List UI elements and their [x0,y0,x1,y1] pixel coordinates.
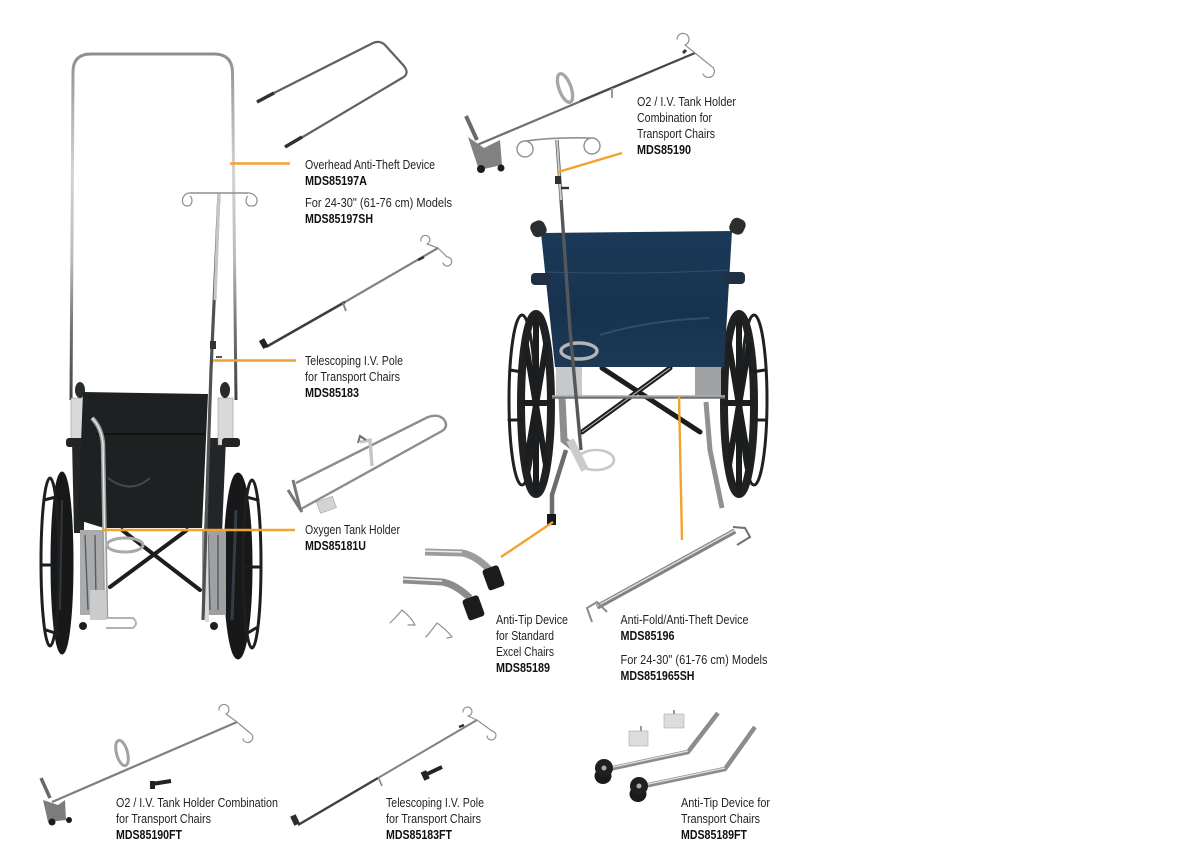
frame and foot rests [547,367,725,525]
orange leader: anti-fold [679,396,682,540]
product: top o2 / i.v. tank holder combination [466,33,714,173]
label: anti-tip device [496,613,568,675]
label: anti-tip device for transport chairs: Anti-Tip Device for [681,796,770,810]
label: bottom telescoping i.v. pole: Telescoping I.V. Pole [386,796,484,810]
label: anti-tip device: for Standard [496,629,554,643]
label: bottom o2 / i.v. tank holder: for Transport Chairs [116,812,211,826]
label: top o2 / i.v. tank holder combination: O2 / I.V. Tank Holder [637,95,736,109]
black seat back [78,392,208,528]
orange leader: o2 tank holder [558,153,622,172]
label: oxygen tank holder [305,523,400,553]
label: anti-fold / anti-theft device [620,613,768,683]
left wheelchair with accessories [41,54,261,658]
label: oxygen tank holder: MDS85181U [305,539,366,553]
right wheelchair with accessories [509,138,767,525]
label: telescoping i.v. pole: MDS85183 [305,386,359,400]
label: anti-tip device: Excel Chairs [496,645,554,659]
label: bottom o2 / i.v. tank holder [116,796,278,842]
product: overhead anti-theft device [257,42,407,147]
label: oxygen tank holder: Oxygen Tank Holder [305,523,400,537]
frame and side plates [66,382,240,630]
telescoping i.v. pole [182,193,257,620]
product: oxygen tank holder [288,416,446,513]
orange leader: oxygen holder [102,529,295,531]
product: bottom o2 / i.v. tank holder [41,704,253,826]
label: bottom telescoping i.v. pole: for Transport Chairs [386,812,481,826]
left wheel [509,314,551,494]
push handles and armrests [528,216,748,285]
label: overhead anti-theft device [305,158,452,226]
right wheel [225,474,261,658]
label: telescoping i.v. pole: Telescoping I.V. Pole [305,354,403,368]
label: top o2 / i.v. tank holder combination: Transport Chairs [637,127,715,141]
oxygen tank tube and ring [90,418,143,628]
orange leader: anti-tip [501,522,553,557]
left wheel [41,473,72,653]
label: bottom o2 / i.v. tank holder: O2 / I.V. Tank Holder Combination [116,796,278,810]
product: anti-tip device [390,551,505,638]
o2 i.v. pole [517,138,600,450]
label: overhead anti-theft device: For 24-30" (61-76 cm) Models [305,196,452,210]
product: bottom telescoping i.v. pole [290,707,496,826]
overhead anti-theft frame [71,54,236,400]
label: anti-fold / anti-theft device: MDS85196 [620,629,675,643]
label: anti-tip device: MDS85189 [496,661,550,675]
orange leader: overhead [230,162,290,165]
cross brace [110,530,200,590]
label: bottom o2 / i.v. tank holder: MDS85190FT [116,828,182,842]
label: anti-tip device for transport chairs: MDS85189FT [681,828,747,842]
label: anti-tip device for transport chairs: Transport Chairs [681,812,760,826]
label: bottom telescoping i.v. pole: MDS85183FT [386,828,452,842]
label: telescoping i.v. pole [305,354,403,400]
oxygen holder rings [561,343,614,470]
label: overhead anti-theft device: MDS85197A [305,174,367,188]
label: top o2 / i.v. tank holder combination [637,95,736,157]
label: top o2 / i.v. tank holder combination: Combination for [637,111,712,125]
label: top o2 / i.v. tank holder combination: MDS85190 [637,143,691,157]
product: telescoping i.v. pole [259,235,452,349]
label: anti-tip device: Anti-Tip Device [496,613,568,627]
label: overhead anti-theft device: MDS85197SH [305,212,373,226]
label: bottom telescoping i.v. pole [386,796,484,842]
navy seat back [541,231,732,367]
right wheel [724,314,767,494]
label: anti-tip device for transport chairs [681,796,770,842]
label: telescoping i.v. pole: for Transport Chairs [305,370,400,384]
product: anti-tip device for transport chairs [594,710,755,802]
cross brace [582,368,700,432]
label: anti-fold / anti-theft device: MDS851965SH [620,669,694,683]
label: overhead anti-theft device: Overhead Anti-Theft Device [305,158,435,172]
product: anti-fold / anti-theft device [587,527,750,622]
label: anti-fold / anti-theft device: For 24-30" (61-76 cm) Models [620,653,768,667]
orange leader: telescoping pole [213,359,296,362]
label: anti-fold / anti-theft device: Anti-Fold/Anti-Theft Device [620,613,749,627]
